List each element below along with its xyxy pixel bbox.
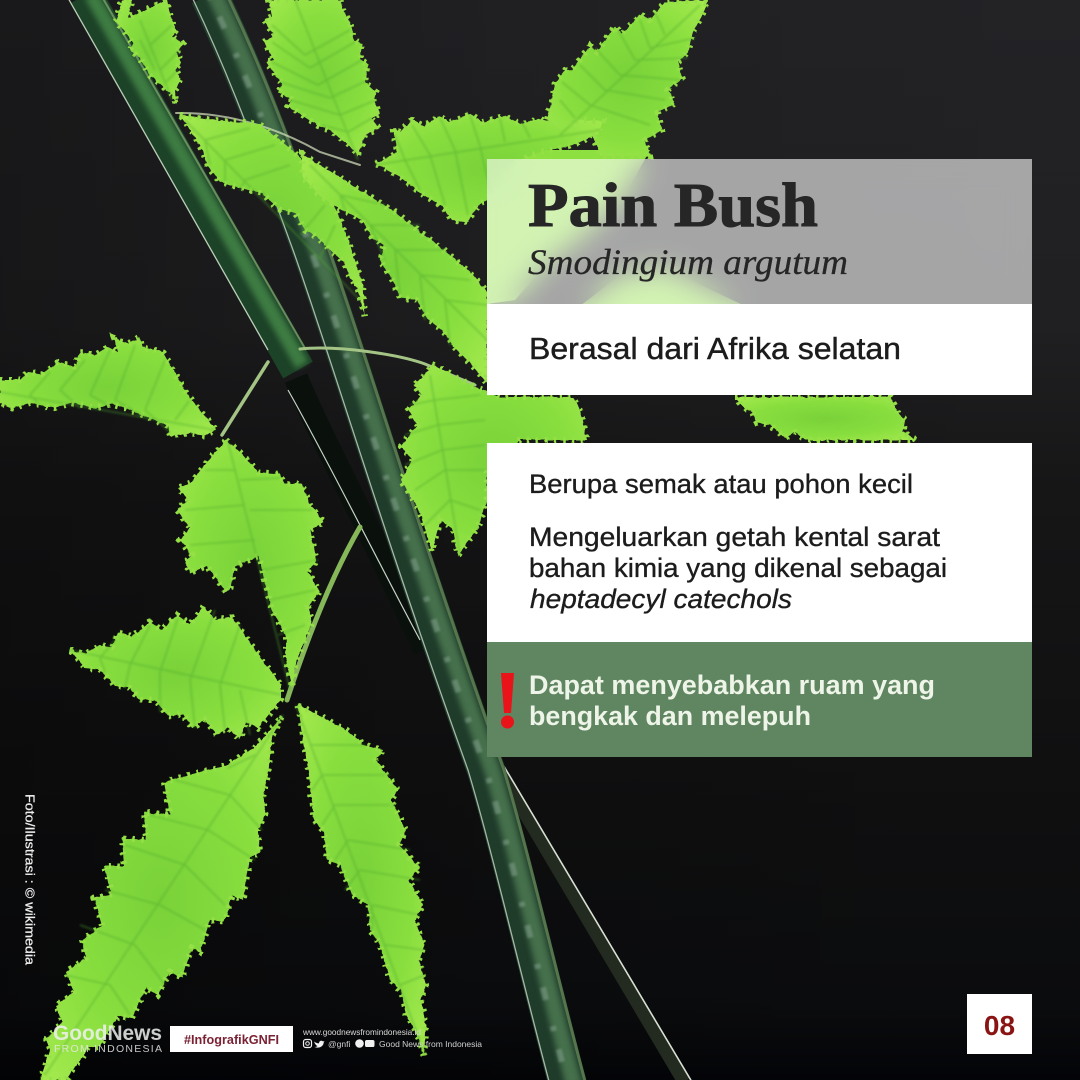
description: sap: [529, 522, 947, 614]
leaf parts hidden behind the translucent title panel: [487, 150, 745, 306]
footer: website and social handles: @gnfi: [328, 1039, 350, 1049]
stem: thin dark stalk: [288, 378, 692, 1080]
leaf: long arching left: [180, 115, 365, 316]
petioles: thin leaf stalks: [176, 113, 475, 700]
panel: title: [487, 159, 1032, 304]
leaf: left pointing middle: [70, 606, 281, 739]
panel: warning: [487, 642, 1032, 757]
warning text: bengkak dan melepuh: [529, 701, 811, 731]
warning text: Dapat menyebabkan ruam yang: [529, 670, 935, 700]
footer: logo GoodNews from Indonesia: [53, 1022, 162, 1055]
icon: red exclamation mark: [501, 673, 514, 728]
footer: logo GoodNews from Indonesia: GoodNews: [53, 1022, 162, 1045]
heading: Pain Bush: Pain Bush: [528, 172, 818, 240]
warning text: [529, 670, 935, 731]
description: sap: Mengeluarkan getah kental sarat: [529, 522, 941, 552]
leaf: right panel gap: [735, 397, 916, 440]
scientific name: Smodingium argutum: [528, 242, 848, 282]
photo credit (rotated): Foto/Ilustrasi : © wikimedia: [22, 794, 36, 965]
leaf: centre double lobed: [177, 440, 324, 688]
icons: facebook, youtube: [355, 1039, 374, 1048]
description line: form: Berupa semak atau pohon kecil: [529, 469, 913, 499]
description: sap: bahan kimia yang dikenal sebagai: [529, 553, 947, 583]
leaf veins: [0, 0, 700, 1075]
footer: hashtag: #InfografikGNFI: [184, 1032, 279, 1047]
leaf: long lower right: [298, 705, 426, 1055]
icons: instagram, twitter: [304, 1040, 324, 1048]
leaf: top right: [547, 0, 708, 156]
footer: website and social handles: [302, 1027, 482, 1049]
leaf: right-pointing: [376, 114, 603, 222]
leaf: lower centre behind panel: [401, 364, 587, 556]
footer: logo GoodNews from Indonesia: FROM INDONESIA: [54, 1043, 162, 1055]
panel: origin: [487, 304, 1032, 395]
leaf: large lower left: [40, 717, 282, 1080]
leaf: far left: [0, 337, 216, 436]
origin text: Berasal dari Afrika selatan: [529, 331, 901, 366]
leaf: top left narrow: [116, 0, 183, 104]
footer: website and social handles: Good News from Indonesia: [379, 1039, 482, 1049]
description: sap: heptadecyl catechols: [530, 584, 792, 614]
stem: rear mottled stalk: [191, 0, 586, 1080]
footer: website and social handles: www.goodnewsfromindonesia.id: [302, 1027, 421, 1037]
page number: 08: [984, 1010, 1015, 1041]
leaf: top centre: [264, 0, 380, 156]
page number: [967, 994, 1032, 1054]
leaf: long arching right: [302, 154, 487, 383]
stem: front green stalk: [68, 0, 306, 370]
panel: description: [487, 443, 1032, 642]
footer: hashtag: [170, 1026, 293, 1052]
